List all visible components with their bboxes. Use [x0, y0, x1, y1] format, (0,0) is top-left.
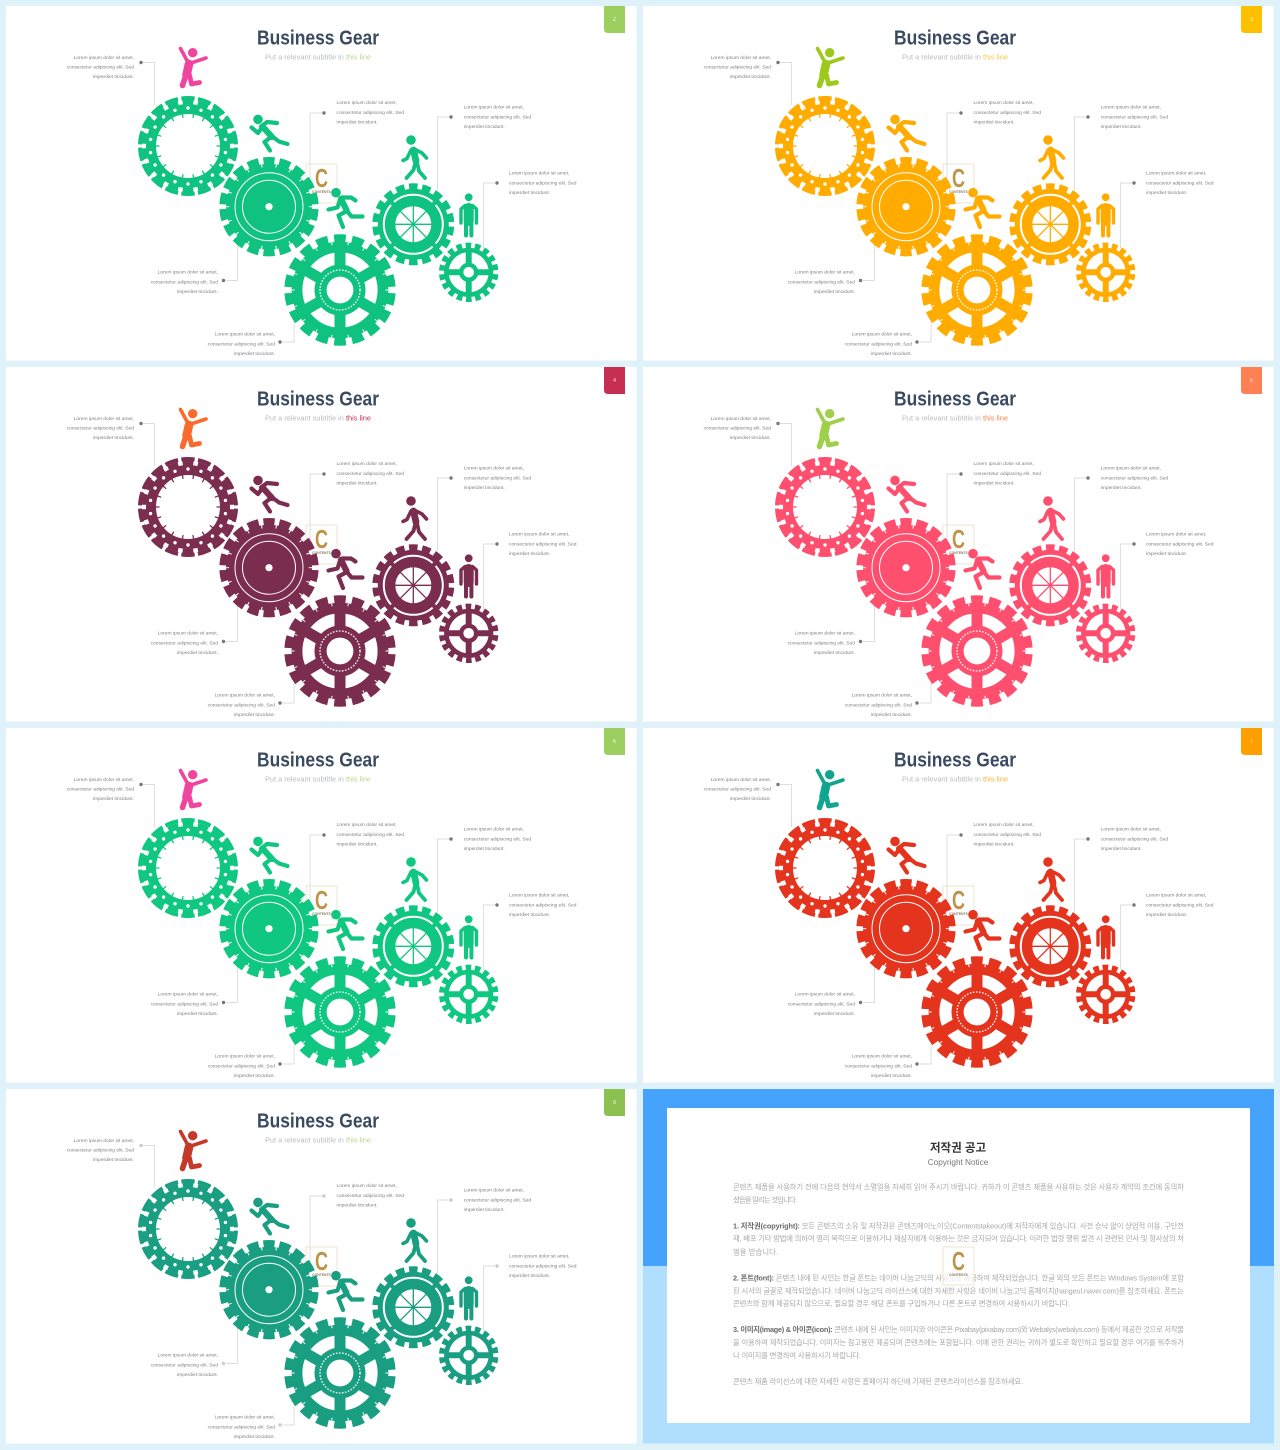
subtitle: Put a relevant subtitle in this line	[902, 414, 1008, 422]
callout 5	[788, 245, 874, 295]
notice body text: 콘텐츠 제품 라이선스에 대한 자세한 사항은 홈페이지 하단에 기재된 콘텐츠라이선스를 참조하세요.	[733, 1377, 1023, 1386]
callout 4: Lorem ipsum dolor sit amet,	[509, 532, 569, 538]
callout 2	[310, 1183, 404, 1263]
callout 1: imperdiet tincidunt.	[730, 796, 771, 802]
page tag: 8	[613, 1100, 617, 1106]
callout 4: imperdiet tincidunt.	[1146, 912, 1187, 918]
page tag: 2	[613, 17, 617, 23]
panel: slide 6	[6, 728, 636, 1082]
callout 2: imperdiet tincidunt.	[336, 1202, 378, 1208]
callout 3: consectetur adipiscing elit. Sed	[1101, 836, 1168, 842]
callout 3: Lorem ipsum dolor sit amet,	[464, 466, 524, 472]
watermark logo: CONTENTS	[949, 912, 969, 916]
notice body text: 콘텐츠 제품을 사용하기 전에 다음의 현약서 소멸일을 자세히 읽어 주시기 바랍니다. 귀하가 이 콘텐츠 제품을 사용하는 것은 사용자 계약의 조건에 동의하	[733, 1182, 1184, 1192]
page tag: 7	[1250, 739, 1254, 745]
callout 5	[151, 245, 238, 295]
callout 3: consectetur adipiscing elit. Sed	[464, 114, 531, 120]
panel: slide 5	[643, 367, 1274, 722]
watermark logo: C	[315, 1246, 328, 1276]
callout 6	[208, 1403, 294, 1440]
callout 2: imperdiet tincidunt.	[336, 120, 378, 126]
callout 5	[788, 606, 874, 656]
callout 2: consectetur adipiscing elit. Sed	[974, 832, 1041, 838]
callout 1: consectetur adipiscing elit. Sed	[67, 787, 134, 793]
callout 1: imperdiet tincidunt.	[730, 74, 771, 80]
gears and figures	[140, 48, 496, 342]
notice body text: 콘텐츠와 함께 제공되지 않으므로, 필요할 경우 해당 폰트를 구입하거나 다른 폰트로 변경하여 사용하시기 바랍니다.	[733, 1299, 1070, 1308]
callout 4: consectetur adipiscing elit. Sed	[509, 542, 577, 548]
callout 2: consectetur adipiscing elit. Sed	[974, 471, 1041, 477]
callout 6: imperdiet tincidunt.	[871, 1073, 912, 1079]
callout 4: Lorem ipsum dolor sit amet,	[1146, 170, 1206, 176]
callout 5: imperdiet tincidunt.	[177, 650, 218, 656]
callout 3: Lorem ipsum dolor sit amet,	[1101, 104, 1161, 110]
callout 6	[208, 681, 294, 718]
callout 2: consectetur adipiscing elit. Sed	[336, 110, 404, 116]
notice body text: 2. 폰트(font): 콘텐츠 내에 된 사인는 한글 폰트는 네이버 나눔고딕의 사용으로 제공하여 제작되었습니다. 한글 외의 모든 폰트는 Windows System에 포함	[733, 1274, 1184, 1282]
watermark logo	[306, 885, 337, 925]
callout 3: consectetur adipiscing elit. Sed	[1101, 476, 1168, 482]
callout 5: Lorem ipsum dolor sit amet,	[795, 630, 855, 636]
callout 2	[310, 100, 404, 180]
callout 1: consectetur adipiscing elit. Sed	[704, 426, 771, 432]
callout 1: Lorem ipsum dolor sit amet,	[74, 55, 134, 61]
callout 3: Lorem ipsum dolor sit amet,	[464, 826, 524, 832]
callout 3: imperdiet tincidunt.	[1101, 485, 1142, 491]
callout 2	[310, 822, 404, 902]
watermark logo: CONTENTS	[312, 190, 332, 194]
callout 5: imperdiet tincidunt.	[177, 1011, 218, 1017]
watermark logo: C	[315, 885, 328, 915]
callout 1: imperdiet tincidunt.	[93, 74, 134, 80]
callout 4	[484, 170, 577, 248]
callout 6	[845, 681, 931, 718]
heading: Business Gear	[894, 388, 1016, 410]
notice body text: 된 시서의 글꼴로 제작되었습니다. 네이버 나눔고딕 라이선스에 대한 자세한 사항은 네이버 나눔고딕 홈페이지(hangeul.naver.com)를 참조하세요. 폰트는	[733, 1286, 1184, 1296]
callout 5: consectetur adipiscing elit. Sed	[788, 640, 855, 646]
callout 1	[67, 416, 154, 466]
callout 1: Lorem ipsum dolor sit amet,	[711, 55, 771, 61]
callout 5: consectetur adipiscing elit. Sed	[151, 1002, 218, 1008]
page tag	[604, 6, 625, 33]
notice body text	[733, 1182, 1184, 1386]
callout 5: consectetur adipiscing elit. Sed	[151, 1362, 218, 1368]
callout 3: Lorem ipsum dolor sit amet,	[464, 1188, 524, 1194]
callout 2: imperdiet tincidunt.	[336, 842, 378, 848]
callout 4	[484, 892, 577, 970]
callout 6	[208, 320, 294, 357]
callout 2: Lorem ipsum dolor sit amet,	[336, 822, 397, 828]
callout 1	[704, 55, 792, 105]
subtitle: Put a relevant subtitle in this line	[902, 774, 1008, 784]
callout 4: consectetur adipiscing elit. Sed	[1146, 902, 1214, 908]
callout 6: consectetur adipiscing elit. Sed	[845, 702, 912, 708]
callout 1: imperdiet tincidunt.	[93, 1157, 134, 1163]
callout 3: imperdiet tincidunt.	[464, 485, 505, 491]
callout 6: Lorem ipsum dolor sit amet,	[215, 1054, 275, 1060]
callout 1	[67, 1138, 154, 1188]
notice body text: 나 이미지를 변경하여 사용하시기 바랍니다.	[733, 1351, 861, 1360]
callout 2	[310, 461, 404, 541]
notice subheading: Copyright Notice	[928, 1158, 989, 1167]
callout 4	[484, 1254, 577, 1331]
callout 1: consectetur adipiscing elit. Sed	[67, 1148, 134, 1154]
subtitle: Put a relevant subtitle in this line	[265, 774, 371, 784]
callout 5: imperdiet tincidunt.	[814, 1011, 855, 1017]
page tag	[1241, 367, 1262, 394]
gears and figures	[777, 409, 1133, 702]
notice body text: 재, 배포 기타 방법에 의하여 영리 목적으로 이용하거나 제삼자에게 이용하는 것은 금지되어 있습니다. 이러한 법령 행위 발견 시 관련된 민사 및 형사상의 처	[733, 1234, 1184, 1243]
subtitle: Put a relevant subtitle in this line	[265, 52, 371, 62]
callout 3	[1074, 826, 1168, 912]
callout 4: imperdiet tincidunt.	[1146, 551, 1187, 557]
callout 2	[947, 461, 1041, 541]
callout 6: imperdiet tincidunt.	[234, 351, 275, 357]
callout 2: consectetur adipiscing elit. Sed	[336, 471, 404, 477]
callout 5	[151, 967, 238, 1017]
callout 1: Lorem ipsum dolor sit amet,	[74, 416, 134, 422]
panel: slide 3	[643, 6, 1274, 360]
callout 4: consectetur adipiscing elit. Sed	[1146, 542, 1214, 548]
callout 5	[151, 1328, 238, 1378]
callout 6	[845, 320, 931, 357]
callout 6: consectetur adipiscing elit. Sed	[845, 1064, 912, 1070]
callout 5: Lorem ipsum dolor sit amet,	[158, 270, 218, 276]
notice heading: 저작권 공고	[930, 1140, 986, 1154]
callout 3	[1074, 104, 1168, 190]
heading: Business Gear	[257, 28, 379, 50]
callout 1: consectetur adipiscing elit. Sed	[704, 787, 771, 793]
watermark logo: CONTENTS	[949, 1273, 969, 1277]
watermark logo: CONTENTS	[312, 551, 332, 555]
gears and figures	[140, 409, 496, 702]
page tag	[604, 367, 625, 394]
panel: copyright notice	[643, 1089, 1274, 1444]
callout 5: imperdiet tincidunt.	[177, 289, 218, 295]
callout 5: imperdiet tincidunt.	[177, 1372, 218, 1378]
callout 5: Lorem ipsum dolor sit amet,	[158, 1352, 218, 1358]
notice body text: 3. 이미지(image) & 아이콘(icon): 콘텐츠 내에 된 사인는 이미지와 아이콘은 Pixabay(pixabay.com)와 Webalys(webalys.com) 등에서 제공한 것으로 저작물	[733, 1325, 1184, 1334]
watermark logo	[943, 885, 974, 925]
callout 3: consectetur adipiscing elit. Sed	[464, 836, 531, 842]
callout 4: imperdiet tincidunt.	[509, 551, 550, 557]
subtitle: Put a relevant subtitle in this line	[265, 414, 371, 422]
callout 4	[1120, 892, 1214, 970]
callout 1: consectetur adipiscing elit. Sed	[67, 65, 134, 71]
subtitle: Put a relevant subtitle in this line	[265, 1136, 371, 1144]
callout 6: Lorem ipsum dolor sit amet,	[215, 332, 275, 338]
callout 3	[438, 104, 531, 190]
callout 5: consectetur adipiscing elit. Sed	[151, 280, 218, 286]
page tag: 6	[613, 739, 617, 745]
panel: slide 8	[6, 1089, 636, 1444]
callout 3: imperdiet tincidunt.	[464, 846, 505, 852]
heading: Business Gear	[894, 750, 1016, 772]
callout 2: Lorem ipsum dolor sit amet,	[336, 1183, 397, 1189]
callout 4: imperdiet tincidunt.	[509, 1273, 550, 1279]
callout 6: imperdiet tincidunt.	[234, 1434, 275, 1440]
callout 5	[788, 967, 874, 1017]
callout 5: imperdiet tincidunt.	[814, 289, 855, 295]
callout 4: Lorem ipsum dolor sit amet,	[509, 170, 569, 176]
watermark logo: CONTENTS	[949, 190, 969, 194]
heading: Business Gear	[257, 750, 379, 772]
callout 1: Lorem ipsum dolor sit amet,	[74, 777, 134, 783]
callout 3: Lorem ipsum dolor sit amet,	[464, 104, 524, 110]
callout 3: Lorem ipsum dolor sit amet,	[1101, 466, 1161, 472]
callout 5: Lorem ipsum dolor sit amet,	[158, 992, 218, 998]
callout 5	[151, 606, 238, 656]
callout 3: Lorem ipsum dolor sit amet,	[1101, 826, 1161, 832]
callout 4: consectetur adipiscing elit. Sed	[509, 902, 577, 908]
callout 6: imperdiet tincidunt.	[871, 712, 912, 718]
callout 3	[438, 1188, 531, 1273]
callout 4: Lorem ipsum dolor sit amet,	[1146, 892, 1206, 898]
watermark logo	[943, 1246, 974, 1285]
callout 1: consectetur adipiscing elit. Sed	[704, 65, 771, 71]
watermark logo: CONTENTS	[312, 1273, 332, 1277]
watermark logo: C	[952, 524, 965, 554]
notice body text: 벌을 받습니다.	[733, 1248, 778, 1256]
heading: Business Gear	[894, 28, 1016, 50]
callout 6: imperdiet tincidunt.	[871, 351, 912, 357]
subtitle: Put a relevant subtitle in this line	[902, 52, 1008, 62]
callout 1	[704, 777, 792, 827]
callout 2: Lorem ipsum dolor sit amet,	[974, 461, 1034, 467]
callout 6: imperdiet tincidunt.	[234, 1073, 275, 1079]
callout 6: consectetur adipiscing elit. Sed	[208, 1424, 275, 1430]
watermark logo	[306, 1246, 337, 1286]
watermark logo	[306, 163, 337, 203]
callout 4: Lorem ipsum dolor sit amet,	[509, 1254, 569, 1260]
watermark logo: CONTENTS	[312, 912, 332, 916]
callout 5: Lorem ipsum dolor sit amet,	[795, 270, 855, 276]
callout 2: Lorem ipsum dolor sit amet,	[336, 461, 397, 467]
callout 5: consectetur adipiscing elit. Sed	[788, 1002, 855, 1008]
watermark logo	[943, 163, 974, 203]
callout 4: consectetur adipiscing elit. Sed	[509, 1264, 577, 1270]
callout 1: Lorem ipsum dolor sit amet,	[711, 416, 771, 422]
callout 6: imperdiet tincidunt.	[234, 712, 275, 718]
callout 4: consectetur adipiscing elit. Sed	[1146, 180, 1214, 186]
watermark logo: C	[952, 163, 965, 193]
callout 2: consectetur adipiscing elit. Sed	[336, 1193, 404, 1199]
callout 1	[704, 416, 792, 466]
callout 4: imperdiet tincidunt.	[509, 912, 550, 918]
callout 6: consectetur adipiscing elit. Sed	[208, 1064, 275, 1070]
heading: Business Gear	[257, 388, 379, 410]
notice body text: 1. 저작권(copyright): 모든 콘텐츠의 소유 및 저작권은 콘텐츠메이노이오(Contentstakeout)에 저작자에게 있습니다. 사전 승낙 없이 상업적 이용, 구단전	[733, 1222, 1184, 1230]
callout 6: consectetur adipiscing elit. Sed	[208, 342, 275, 348]
callout 4: Lorem ipsum dolor sit amet,	[509, 892, 569, 898]
callout 1: imperdiet tincidunt.	[730, 435, 771, 441]
callout 4	[1120, 170, 1214, 248]
watermark logo	[943, 524, 974, 564]
panel: slide 4	[6, 367, 636, 722]
callout 4	[484, 532, 577, 609]
callout 1: Lorem ipsum dolor sit amet,	[74, 1138, 134, 1144]
callout 2: Lorem ipsum dolor sit amet,	[974, 100, 1034, 106]
callout 6: Lorem ipsum dolor sit amet,	[215, 692, 275, 698]
callout 1	[67, 777, 154, 827]
page tag: 3	[1250, 17, 1254, 23]
callout 5: consectetur adipiscing elit. Sed	[788, 280, 855, 286]
gears and figures	[777, 770, 1133, 1064]
callout 3	[1074, 466, 1168, 551]
callout 5: Lorem ipsum dolor sit amet,	[158, 630, 218, 636]
callout 5: consectetur adipiscing elit. Sed	[151, 640, 218, 646]
callout 2: consectetur adipiscing elit. Sed	[336, 832, 404, 838]
callout 3: consectetur adipiscing elit. Sed	[464, 476, 531, 482]
watermark logo: C	[315, 163, 328, 193]
callout 2: Lorem ipsum dolor sit amet,	[336, 100, 397, 106]
callout 2: imperdiet tincidunt.	[974, 480, 1015, 486]
callout 3: imperdiet tincidunt.	[464, 124, 505, 130]
watermark logo: C	[952, 885, 965, 915]
callout 3: consectetur adipiscing elit. Sed	[464, 1198, 531, 1204]
page tag	[604, 728, 625, 755]
callout 6: consectetur adipiscing elit. Sed	[845, 342, 912, 348]
callout 1: imperdiet tincidunt.	[93, 435, 134, 441]
callout 4: imperdiet tincidunt.	[1146, 190, 1187, 196]
callout 3: consectetur adipiscing elit. Sed	[1101, 114, 1168, 120]
panel: slide 2	[6, 6, 636, 360]
callout 4: imperdiet tincidunt.	[509, 190, 550, 196]
callout 4	[1120, 532, 1214, 609]
callout 2: imperdiet tincidunt.	[974, 120, 1015, 126]
page tag	[1241, 728, 1262, 755]
callout 3	[438, 826, 531, 912]
page tag: 4	[613, 378, 617, 384]
callout 3: imperdiet tincidunt.	[1101, 124, 1142, 130]
callout 1: consectetur adipiscing elit. Sed	[67, 426, 134, 432]
callout 6	[845, 1042, 931, 1079]
callout 2: Lorem ipsum dolor sit amet,	[974, 822, 1034, 828]
callout 2: imperdiet tincidunt.	[336, 480, 378, 486]
watermark logo: C	[952, 1246, 965, 1276]
callout 5: Lorem ipsum dolor sit amet,	[795, 992, 855, 998]
callout 1	[67, 55, 154, 105]
callout 4: Lorem ipsum dolor sit amet,	[1146, 532, 1206, 538]
callout 5: imperdiet tincidunt.	[814, 650, 855, 656]
watermark logo: CONTENTS	[949, 551, 969, 555]
gears and figures	[140, 1131, 496, 1424]
gears and figures	[777, 48, 1133, 342]
notice body text: 을 이용하여 제작되었습니다. 이미지는 참고용만 제공되며 콘텐츠에는 포함됩니다. 이에 관한 권리는 귀하가 별도로 확인하고 필요할 경우 여기를 위주하거	[733, 1338, 1184, 1347]
callout 4: consectetur adipiscing elit. Sed	[509, 180, 577, 186]
heading: Business Gear	[257, 1110, 379, 1132]
callout 1: Lorem ipsum dolor sit amet,	[711, 777, 771, 783]
callout 2: imperdiet tincidunt.	[974, 842, 1015, 848]
callout 3	[438, 466, 531, 551]
page tag	[1241, 6, 1262, 33]
callout 2	[947, 822, 1041, 902]
callout 2: consectetur adipiscing elit. Sed	[974, 110, 1041, 116]
callout 6	[208, 1042, 294, 1079]
watermark logo: C	[315, 524, 328, 554]
gears and figures	[140, 770, 496, 1064]
page tag: 5	[1250, 378, 1254, 384]
callout 6: consectetur adipiscing elit. Sed	[208, 702, 275, 708]
callout 1: imperdiet tincidunt.	[93, 796, 134, 802]
callout 2	[947, 100, 1041, 180]
callout 3: imperdiet tincidunt.	[464, 1207, 505, 1213]
page tag	[604, 1089, 625, 1116]
callout 6: Lorem ipsum dolor sit amet,	[852, 692, 912, 698]
watermark logo	[306, 524, 337, 564]
callout 3: imperdiet tincidunt.	[1101, 846, 1142, 852]
callout 6: Lorem ipsum dolor sit amet,	[852, 332, 912, 338]
callout 6: Lorem ipsum dolor sit amet,	[215, 1414, 275, 1420]
panel: slide 7	[643, 728, 1274, 1082]
notice body text: 셨음을 알리는 것입니다.	[733, 1196, 797, 1204]
callout 6: Lorem ipsum dolor sit amet,	[852, 1054, 912, 1060]
